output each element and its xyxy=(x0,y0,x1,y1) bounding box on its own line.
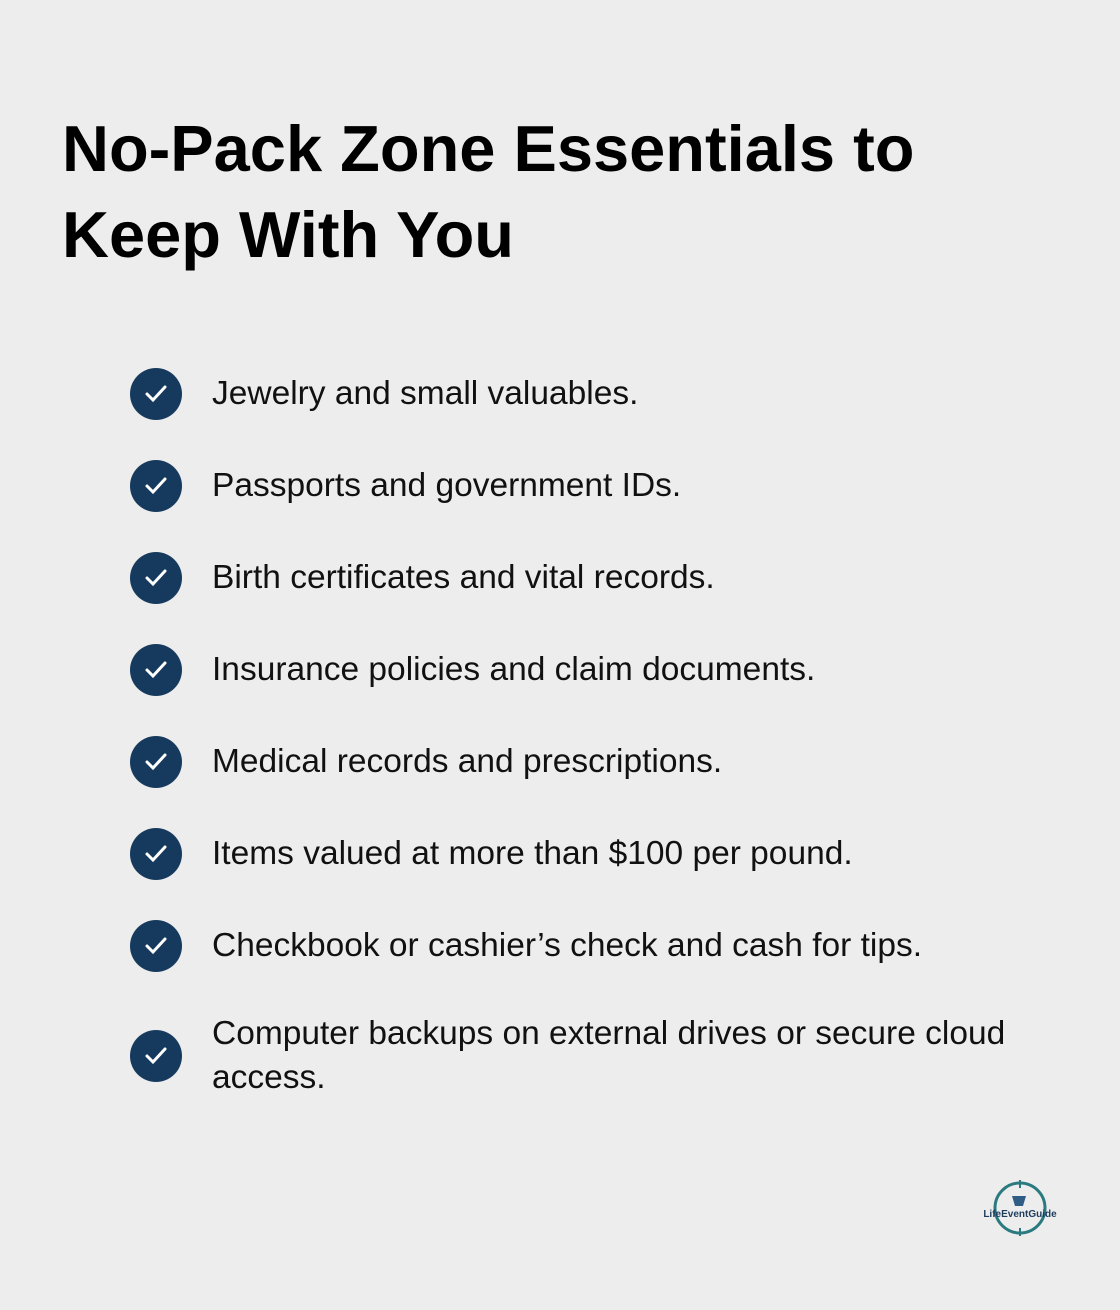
item 3 xyxy=(130,552,715,604)
item 3: Birth certificates and vital records. xyxy=(212,559,715,596)
item 5 xyxy=(130,736,722,788)
item 6 xyxy=(130,828,853,880)
item 7 xyxy=(130,920,922,972)
title: No-Pack Zone Essentials to xyxy=(62,112,914,185)
item 2: Passports and government IDs. xyxy=(212,467,681,504)
logo: LifeEventGuide xyxy=(983,1209,1057,1220)
title: Keep With You xyxy=(62,198,514,271)
item 1: Jewelry and small valuables. xyxy=(212,375,638,412)
item 1 xyxy=(130,368,638,420)
item 2 xyxy=(130,460,681,512)
item 4 xyxy=(130,644,815,696)
title xyxy=(62,112,914,271)
item 7: Checkbook or cashier’s check and cash for tips. xyxy=(212,927,922,964)
item 8: Computer backups on external drives or secure cloud access. xyxy=(212,1015,1005,1096)
item 4: Insurance policies and claim documents. xyxy=(212,651,815,688)
logo xyxy=(983,1180,1057,1236)
item 5: Medical records and prescriptions. xyxy=(212,743,722,780)
item 6: Items valued at more than $100 per pound. xyxy=(212,835,853,872)
